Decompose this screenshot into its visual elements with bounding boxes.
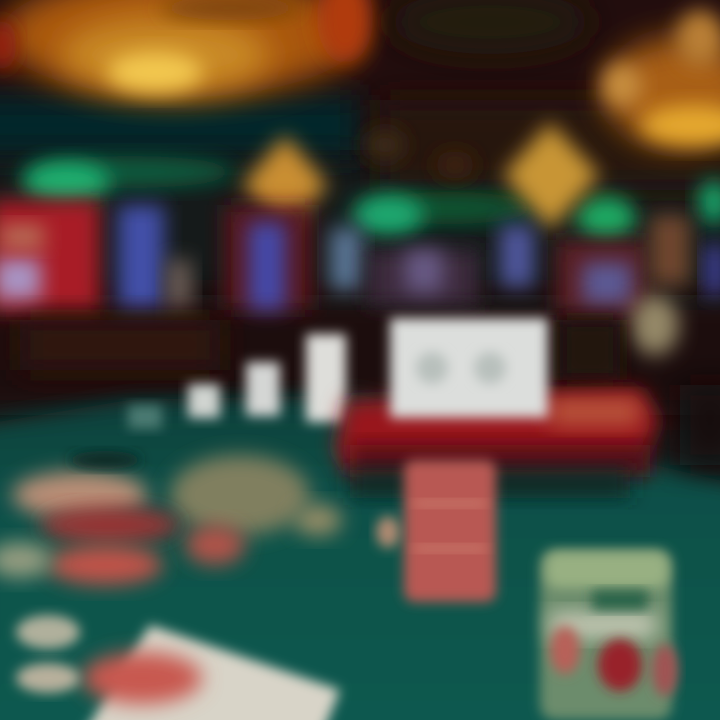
- slot machines: back row: [0, 200, 720, 380]
- chip stack: green and red right: [540, 550, 678, 720]
- chip stack: red centre: [376, 460, 496, 602]
- ceiling: dark centre panel: [390, 0, 590, 54]
- table: green felt: [0, 385, 720, 720]
- white sign: [390, 318, 548, 418]
- gold diamond lamps: [242, 122, 600, 232]
- green lamps: [22, 156, 720, 240]
- white columns: [128, 334, 346, 429]
- pile of cash and chips: left: [0, 451, 342, 585]
- ceiling light: large golden glow: [0, 0, 373, 97]
- chandelier: right: [602, 10, 720, 147]
- playing cards and chips: bottom left: [16, 615, 340, 720]
- red sofa: [335, 388, 660, 498]
